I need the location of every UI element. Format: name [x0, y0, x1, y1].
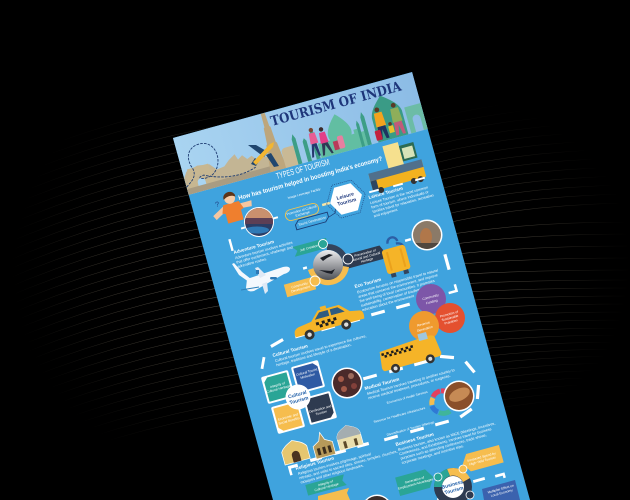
text: business tourism: Conferences, and Exhibitions), involves travel for business	[399, 427, 492, 456]
hub: cultural tourism: Tourism	[289, 395, 310, 406]
text: leisure tourism: Leisure Tourism	[368, 186, 403, 200]
banner: integrity of heritage	[305, 474, 347, 496]
text: religious tourism: Religious tourism involves pilgrimage, spiritual	[298, 452, 372, 476]
quadrant: teal: Integrity of	[270, 381, 285, 389]
photo: bottom partial	[365, 495, 389, 500]
banner: preservation of heritage: Natural and Cultural	[351, 251, 381, 262]
banner: multiple blue: Local Economy	[490, 488, 513, 498]
circle: sustainable practices	[435, 303, 465, 333]
text: cultural tourism	[272, 328, 368, 368]
text: religious tourism: retreats, and visits to sacred sites, shrines, temples, churches,	[299, 449, 398, 480]
circle: sustainable practices: Promotion of	[439, 310, 459, 319]
poster background	[173, 72, 530, 500]
family of travellers	[374, 102, 406, 141]
right domed monument	[372, 96, 408, 142]
header illustration band	[173, 72, 428, 195]
hub: cultural tourism: Cultural	[288, 390, 308, 400]
stone base strip	[187, 166, 294, 195]
quadrant: yellow: Economic and	[277, 412, 299, 422]
text: eco tourism: Ecotourism focuses on responsible travel to natural	[357, 268, 439, 294]
walking tourists	[308, 127, 346, 158]
hub: cultural tourism	[283, 382, 313, 412]
photo: adventure	[244, 207, 274, 237]
text: adventure tourism: Adventure tourism involves activities	[235, 241, 293, 260]
connector lines	[329, 205, 336, 217]
Qutub Minar	[260, 113, 287, 172]
banner: multiple blue: Multiplier Effect on	[487, 483, 514, 495]
heading: types of tourism: TYPES OF TOURISM	[275, 157, 331, 181]
banner: high value	[460, 445, 504, 473]
text: eco tourism: education about the environment	[362, 294, 414, 312]
sky arch	[198, 178, 206, 186]
text: leisure tourism	[368, 178, 435, 218]
text: business tourism: Business Tourism	[395, 432, 434, 447]
banner: preservation of heritage	[343, 245, 386, 269]
circle: sustainable practices: Practices	[444, 318, 458, 326]
banner: integrity of heritage: Cultural Heritage	[314, 482, 339, 492]
text: cultural tourism: Cultural Tourism	[272, 343, 308, 358]
text: eco tourism: the well-being of local communities. It promotes	[359, 279, 435, 303]
question mark: ?	[215, 201, 220, 209]
banner: job creation: Job Creation	[299, 243, 319, 252]
text: religious tourism: mosques and other religious landmarks.	[300, 463, 364, 485]
text: leisure tourism: and enjoyment.	[373, 208, 399, 218]
quadrant: dark	[303, 391, 337, 425]
text: adventure tourism: Adventure Tourism	[233, 239, 275, 255]
banner: high value: High-Yield Tourists	[469, 455, 497, 466]
icon: temple	[279, 437, 310, 465]
hexagon: leisure tourism: Tourism	[337, 197, 358, 208]
text: medical tourism: Medical Tourism	[364, 377, 400, 391]
left India Gate	[185, 163, 217, 194]
hub nodes	[434, 465, 474, 499]
text: business tourism	[395, 415, 499, 465]
banner: preservation of heritage: Heritage	[360, 257, 374, 264]
icon: suitcase	[379, 235, 412, 279]
hub: business tourism	[434, 468, 472, 500]
banner: community development: Development	[291, 285, 311, 294]
capsule: tourist destinations	[294, 212, 330, 230]
text: medical tourism: receive medical treatment, procedures, or surgeries.	[368, 374, 451, 400]
hexagon: leisure tourism: Leisure	[336, 191, 355, 202]
text: leisure tourism: families travel for relaxation, recreation	[372, 193, 434, 214]
text: adventure tourism: that offer excitement, challenge and	[236, 245, 293, 265]
banner: integrity of heritage: Integrity of	[318, 479, 334, 487]
text: medical tourism	[364, 362, 456, 401]
icon: taxi van	[376, 330, 443, 376]
icon: yellow taxi	[289, 296, 366, 343]
capsule: promotion of cultural exchange	[284, 202, 320, 222]
label: economics of health services: Economics of Health Services	[386, 390, 428, 405]
banner: preservation of heritage: Preservation of	[354, 248, 376, 258]
hub: business tourism: Business	[441, 479, 464, 491]
tan skyline strip	[184, 154, 275, 195]
label: healthcare infrastructure: Revenue for Healthcare Infrastructure	[373, 406, 426, 424]
icon: airplane	[232, 263, 290, 294]
icon: buildings	[382, 138, 419, 170]
text: adventure tourism: adrenaline rushes.	[237, 257, 267, 269]
banner: employment	[395, 468, 436, 496]
quadrant: blue: Motivation	[300, 372, 316, 380]
title: TOURISM OF INDIA	[269, 78, 404, 130]
heading: question: How has tourism helped in boosting India's economy?	[238, 156, 383, 202]
text: business tourism: purposes such as attending conferences, trade shows,	[400, 433, 487, 461]
hexagon: leisure tourism	[322, 177, 370, 221]
capsule: tourist destinations: Tourist Destinations	[298, 215, 327, 227]
right gate	[404, 103, 428, 134]
circle: sustainable practices: Sustainable	[441, 314, 459, 322]
circle: community funding: Funding	[426, 298, 438, 305]
text: eco tourism: sustainability, conservation of biodiversity, and	[360, 284, 434, 308]
text: medical tourism: Medical Tourism involves traveling to another country to	[367, 368, 455, 396]
circle: revenue generation: Revenue	[417, 320, 431, 328]
quadrant: dark: Destination and	[309, 404, 332, 414]
segmented ring chart	[432, 391, 450, 413]
banner: community development	[284, 277, 316, 297]
text: religious tourism: Religious Tourism	[295, 456, 335, 471]
circle: revenue generation: Generation	[416, 325, 433, 333]
green minarets	[292, 134, 312, 164]
quadrant: teal: Cultural Heritage	[266, 384, 291, 394]
text: adventure tourism	[233, 234, 296, 269]
text: cultural tourism: Cultural tourism involves travel to experience the cultures,	[275, 334, 367, 363]
road dashes	[228, 177, 506, 500]
icon: tour bus	[368, 159, 427, 195]
quadrant: blue	[291, 360, 325, 394]
airplane in header	[248, 142, 279, 167]
text: leisure tourism: form of tourism, where individuals or	[371, 190, 430, 210]
text: eco tourism: Eco Tourism	[354, 277, 382, 289]
text: eco tourism: areas that conserve the environment, and improve	[358, 273, 438, 299]
photo: eco	[412, 220, 442, 250]
circle: community funding: Community	[422, 293, 439, 301]
cultural tourism quadrant diagram	[261, 360, 337, 434]
banner: community development: Community	[291, 281, 308, 289]
circle: community funding	[416, 284, 446, 314]
text: business tourism: corporate meetings, and incentive trips.	[401, 444, 464, 465]
banner: employment: Generation of	[404, 475, 425, 485]
dashed flight path	[186, 143, 256, 188]
banner: job creation	[292, 238, 329, 257]
text: cultural tourism: heritage, traditions and lifestyle of a destination.	[276, 343, 352, 367]
banner: yellow lower	[318, 488, 350, 500]
quadrant: yellow: Social Benefits	[278, 416, 300, 426]
label: diversification: Diversification of Tourism Offerings	[386, 420, 435, 437]
banner: multiple blue	[482, 480, 520, 500]
icon: mosque	[334, 422, 363, 451]
banner nodes	[310, 240, 353, 286]
capsule: promotion of cultural exchange: Promotion of Cultural	[286, 204, 317, 216]
banner: employment: Employment Advantages	[397, 477, 434, 491]
icon: church	[310, 430, 336, 459]
quadrant: blue: Cultural Tourist	[296, 367, 318, 377]
quadrant: teal	[261, 370, 295, 404]
tan arches	[281, 145, 299, 168]
text: leisure tourism: Leisure Tourism is the most common	[370, 185, 429, 205]
quadrant: dark: Tourism	[315, 409, 328, 416]
capsule: promotion of cultural exchange: Exchange	[295, 210, 310, 218]
circle: revenue generation	[409, 311, 439, 341]
hub: business tourism: Tourism	[444, 485, 465, 496]
text: image leverage facility: Image Leverage Facility	[287, 187, 321, 200]
icon: confused boy	[209, 187, 255, 227]
photo: food	[444, 380, 474, 412]
Taj Mahal	[318, 114, 368, 158]
text: religious tourism	[295, 439, 399, 485]
photo: crowd	[332, 368, 362, 398]
donut chart: adventure	[308, 244, 349, 285]
quadrant: yellow	[271, 400, 305, 434]
text: eco tourism	[354, 262, 444, 312]
banner: high value: Increased Spend by	[467, 451, 496, 463]
text: business tourism: Business tourism, also known as MICE (Meetings, Incentives,	[398, 421, 496, 452]
